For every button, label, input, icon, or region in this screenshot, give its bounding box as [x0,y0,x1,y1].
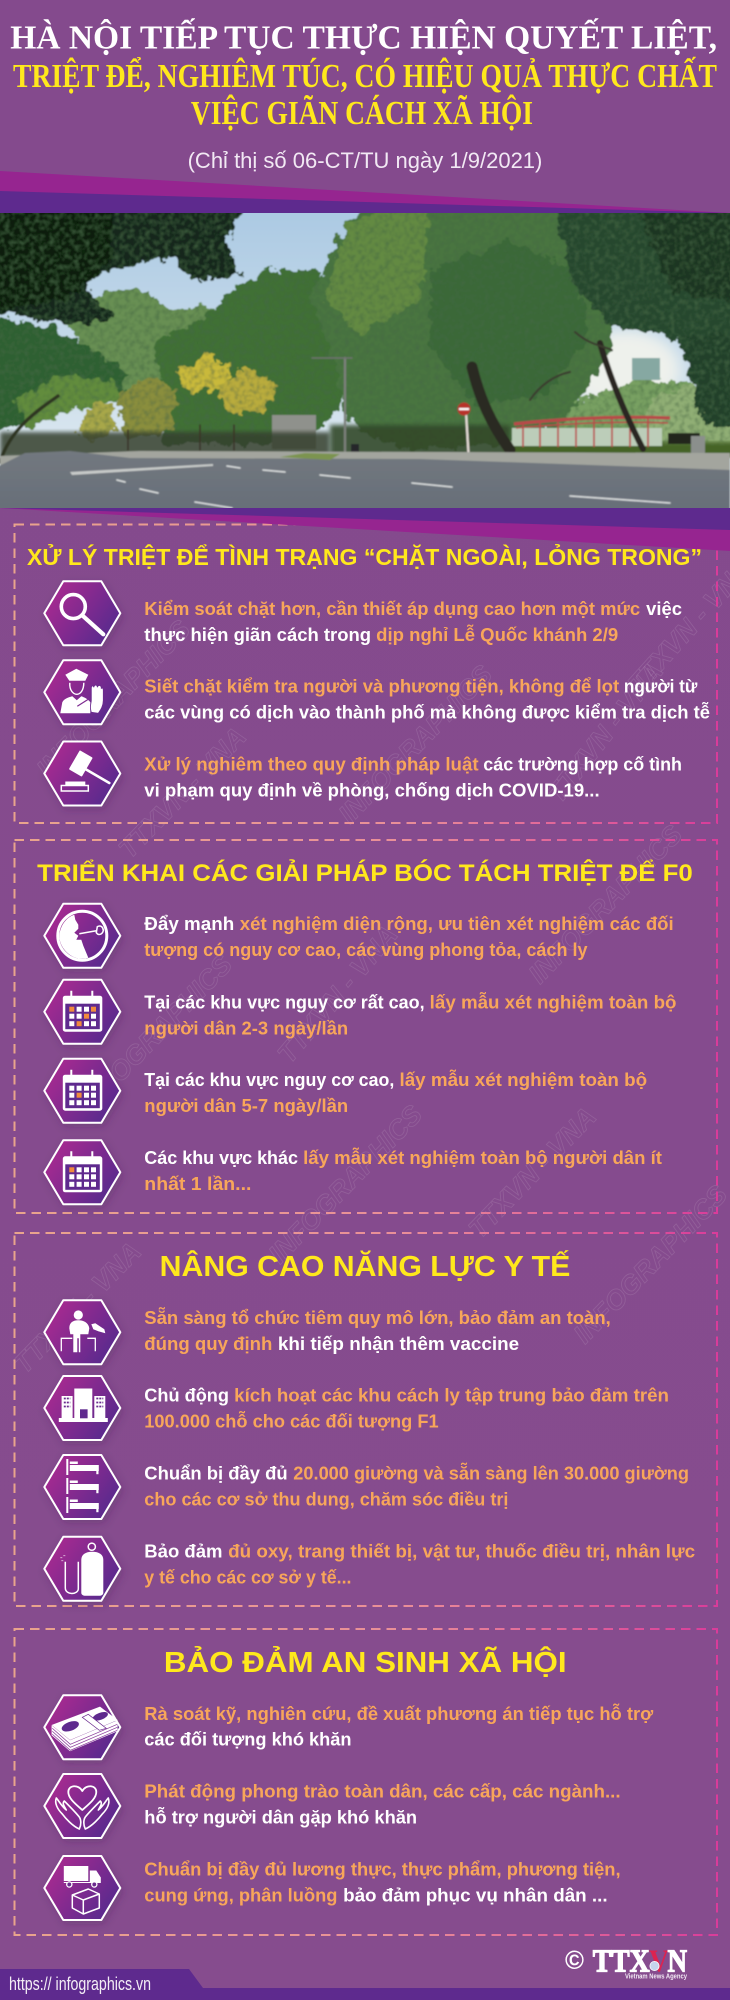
watermarks: TTXVN - VNA [8,1236,147,1379]
text: item 2: Siết chặt kiểm tra người và phương tiện, không để lọt [144,677,619,697]
icon: heart in hands [44,1774,120,1838]
text: item 1 [144,1306,611,1354]
text: item 3 [144,755,682,801]
header ribbon [0,171,730,213]
text: item 3: Chuẩn bị đầy đủ [144,1463,288,1483]
logo: TTXVN: TTX [593,1943,650,1979]
text: item 4: Bảo đảm [144,1542,222,1562]
text: item 3: lấy mẫu xét nghiệm toàn bộ [400,1069,647,1090]
title: HÀ NỘI TIẾP TỤC THỰC HIỆN QUYẾT LIỆT, [10,18,717,57]
trunks and pole [0,332,643,462]
watermarks: INFOGRAPHICS [31,614,196,784]
logo: TTXVN: © [565,1945,584,1975]
red bridge [514,417,670,447]
text: item 1: dịp nghỉ Lễ Quốc khánh 2/9 [376,624,618,645]
text: item 2: 100.000 chỗ cho các đối tượng F1 [144,1411,439,1432]
text: item 3 [144,1461,689,1509]
text: item 1: tượng có nguy cơ cao, các vùng phong tỏa, cách ly [144,940,588,960]
text: item 1: Đẩy mạnh [144,914,234,934]
logo: TTXVN: N [668,1943,687,1979]
text: item 4: lấy mẫu xét nghiệm toàn bộ người dân ít [303,1147,662,1168]
heading: XỬ LÝ TRIỆT ĐỂ TÌNH TRẠNG “CHẶT NGOÀI, LỎNG TRONG” [27,542,702,570]
watermarks: TTXVN - VNA [541,657,669,809]
text: item 1: Rà soát kỹ, nghiên cứu, đề xuất phương án tiếp tục hỗ trợ [144,1703,653,1724]
logo: TTXVN: V [649,1943,669,1979]
text: item 4 [144,1147,662,1194]
text: item 4: y tế cho các cơ sở y tế... [144,1568,352,1588]
text: item 4 [144,1542,695,1588]
watermarks [8,553,730,1379]
panel: xử lý triệt để [14,524,717,823]
lower photo ribbon [0,508,730,551]
logo: TTXVN [565,1943,687,1980]
text: item 1 [144,914,674,960]
watermarks: INFOGRAPHICS [73,949,238,1119]
icon: oxygen cylinder [44,1537,120,1601]
heading: NÂNG CAO NĂNG LỰC Y TẾ [160,1249,570,1283]
text: item 3: 20.000 giường và sẵn sàng lên 30.000 giường [293,1461,689,1483]
text: item 3: Chuẩn bị đầy đủ lương thực, thực phẩm, phương tiện, [144,1860,621,1880]
icon: calendar [44,1140,120,1204]
text: item 1 [144,599,682,645]
text: item 3: các trường hợp cố tình [483,755,682,775]
text: item 2: Tại các khu vực nguy cơ rất cao, [144,992,425,1012]
text: item 3: Tại các khu vực nguy cơ cao, [144,1070,394,1090]
text: item 1: thực hiện giãn cách trong [144,625,371,645]
text: item 2: người dân 2-3 ngày/lần [144,1018,348,1038]
text: item 2: các vùng có dịch vào thành phố mà không được kiểm tra dịch tễ [144,702,710,723]
text: item 1: xét nghiệm diện rộng, ưu tiên xét nghiệm các đối [240,914,674,934]
icon: police officer [44,660,120,724]
text: item 2: hỗ trợ người dân gặp khó khăn [144,1807,417,1828]
text: item 1: việc [646,599,682,619]
panel: bảo đảm an sinh xã hội [14,1629,717,1935]
text: item 1 [144,1703,653,1750]
heading: BẢO ĐẢM AN SINH XÃ HỘI [164,1645,567,1679]
title [10,18,717,132]
subtitle: (Chỉ thị số 06-CT/TU ngày 1/9/2021) [188,148,542,173]
text: item 3: cho các cơ sở thu dung, chăm sóc điều trị [144,1489,508,1509]
text: item 3: cung ứng, phân luồng [144,1886,338,1906]
logo: TTXVN: Vietnam News Agency [625,1973,687,1980]
text: item 1: khi tiếp nhận thêm vaccine [278,1334,519,1354]
icon: calendar [44,1059,120,1123]
text: item 4: đủ oxy, trang thiết bị, vật tư, thuốc điều trị, nhân lực [228,1542,695,1562]
text: item 1: các đối tượng khó khăn [144,1730,352,1750]
icon: beds [44,1455,120,1519]
text: item 4: Các khu vực khác [144,1148,298,1168]
panel: triển khai giải pháp [14,840,717,1213]
text: item 2 [144,1386,669,1432]
text: item 3: Xử lý nghiêm theo quy định pháp luật [144,755,479,775]
text: item 2 [144,991,677,1038]
icon: truck and parcel [44,1856,120,1920]
watermarks: TTXVN - VNA [463,1101,602,1244]
water [512,428,662,446]
text: item 2: Phát động phong trào toàn dân, các cấp, các ngành... [144,1782,621,1802]
text: item 3 [144,1860,621,1906]
icon: vaccination [44,1300,120,1364]
text: item 2: người từ [624,677,698,697]
text: item 3: bảo đảm phục vụ nhân dân ... [343,1886,608,1906]
icon: gavel [44,742,120,806]
watermarks: INFOGRAPHICS [523,819,688,989]
panel: nâng cao năng lực y tế [14,1233,717,1606]
text: item 3 [144,1069,647,1116]
icon: globe and swab test [44,904,120,968]
title: VIỆC GIÃN CÁCH XÃ HỘI [191,94,533,132]
text: item 1: đúng quy định [144,1334,272,1354]
distant building [632,358,660,380]
photo: empty tree-lined street by Hoan Kiem lake [0,213,730,508]
icon: magnifier [44,581,120,645]
footer bar with website tab [0,1969,730,2000]
heading: TRIỂN KHAI CÁC GIẢI PHÁP BÓC TÁCH TRIỆT ĐỂ F0 [37,858,693,887]
watermarks: INFOGRAPHICS [333,659,498,829]
watermarks: TTXVN - VNA [272,920,404,1069]
text: item 4: nhất 1 lần... [144,1174,251,1194]
text: item 1: Kiểm soát chặt hơn, cần thiết áp dụng cao hơn một mức [144,599,640,619]
text: item 2 [144,1782,621,1828]
icon: banknotes [44,1695,120,1759]
text: item 2: lấy mẫu xét nghiệm toàn bộ [430,991,676,1012]
text: item 3: người dân 5-7 ngày/lần [144,1096,348,1116]
icon: building [44,1376,120,1440]
no-entry sign [458,402,470,462]
watermarks: TTXVN - VNA [113,721,252,864]
bench and bin [350,432,706,454]
icon: calendar [44,980,120,1044]
footer bar with website tab: https:// infographics.vn [9,1974,151,1994]
watermarks: INFOGRAPHICS [568,1179,730,1349]
sidewalk and road [0,451,730,471]
text: item 2: kích hoạt các khu cách ly tập trung bảo đảm trên [234,1386,669,1406]
text: item 1: Sẵn sàng tổ chức tiêm quy mô lớn, bảo đảm an toàn, [144,1306,611,1328]
watermarks: INFOGRAPHICS [263,1099,428,1269]
understory shadow [0,432,330,458]
text: item 2 [144,677,710,723]
text: item 3: vi phạm quy định về phòng, chống dịch COVID-19... [144,781,600,801]
text: item 2: Chủ động [144,1386,229,1406]
